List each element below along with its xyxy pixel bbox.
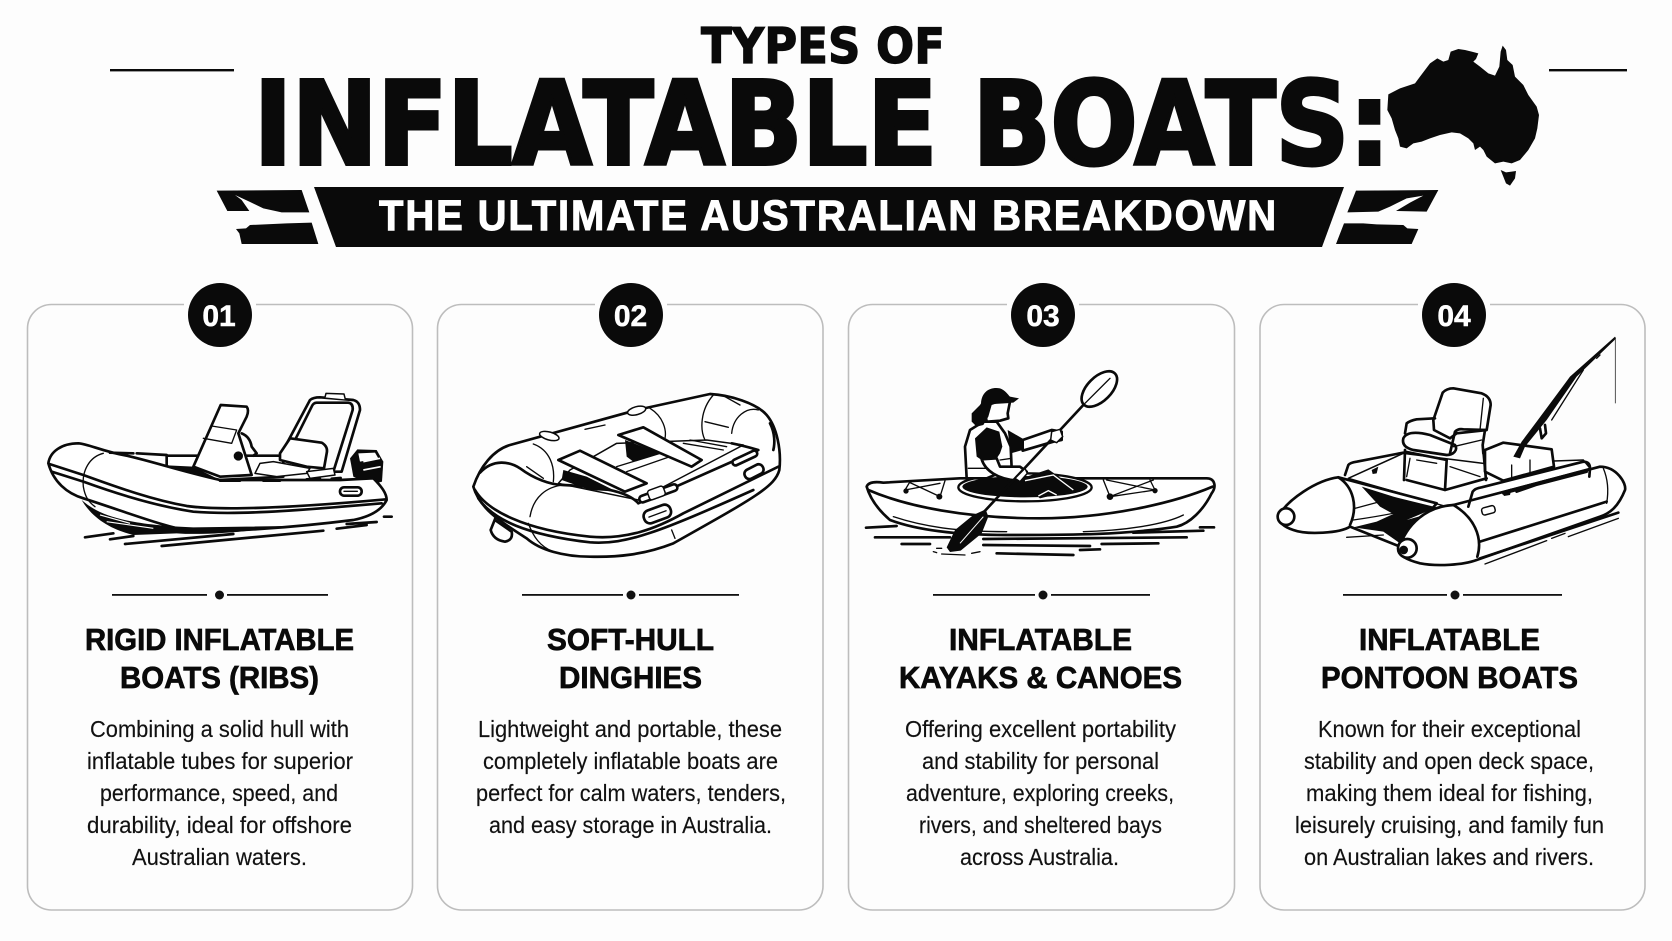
- icon: map of Australia: [1387, 46, 1539, 186]
- title side rule right: [1549, 69, 1627, 71]
- heading: [899, 622, 1182, 695]
- title side rule left: [110, 69, 234, 71]
- seat legs: [1404, 450, 1487, 490]
- description: [1295, 716, 1604, 870]
- illustration: rigid inflatable boat: [48, 393, 392, 546]
- description: completely inflatable boats are: [483, 748, 778, 774]
- rails far: [1345, 453, 1403, 475]
- under stripes: [1480, 513, 1618, 558]
- heading: KAYAKS & CANOES: [899, 660, 1182, 695]
- divider: [112, 590, 328, 600]
- ribbon tail right: [1336, 190, 1438, 244]
- engine: [350, 449, 383, 485]
- description: [905, 716, 1176, 870]
- description: leisurely cruising, and family fun: [1295, 812, 1604, 838]
- heading: DINGHIES: [559, 660, 702, 695]
- panel: card 2 soft-hull dinghies: [438, 283, 823, 910]
- illustration: kayak with paddler: [866, 365, 1214, 555]
- near rail: [1468, 462, 1590, 507]
- torso: [965, 422, 1012, 478]
- heading: SOFT-HULL: [547, 622, 714, 657]
- heading: RIGID INFLATABLE: [85, 622, 354, 657]
- title: types of: TYPES OF: [701, 18, 945, 75]
- head: [983, 402, 1010, 422]
- hull: [867, 478, 1214, 535]
- description: and easy storage in Australia.: [489, 812, 772, 838]
- divider: [933, 590, 1150, 600]
- heading: [85, 622, 354, 695]
- heading: INFLATABLE: [949, 622, 1132, 657]
- description: making them ideal for fishing,: [1306, 780, 1593, 806]
- number badge 02: 02: [614, 300, 647, 333]
- arms: [982, 458, 1027, 481]
- number badge 01: [184, 283, 256, 347]
- number badge 02: [595, 283, 667, 347]
- description: Lightweight and portable, these: [478, 716, 782, 742]
- description: Known for their exceptional: [1318, 716, 1581, 742]
- tube: [48, 443, 387, 532]
- number badge 01: 01: [202, 300, 236, 333]
- ribbon tail left: [217, 190, 318, 244]
- armrests: [1405, 418, 1435, 433]
- description: and stability for personal: [922, 748, 1159, 774]
- description: Australian waters.: [132, 844, 307, 870]
- title: inflatable boats: INFLATABLE BOATS:: [254, 58, 1390, 192]
- description: durability, ideal for offshore: [87, 812, 352, 838]
- heading: PONTOON BOATS: [1321, 660, 1578, 695]
- divider: [522, 590, 739, 600]
- cockpit: [958, 473, 1092, 501]
- rear frame: [283, 397, 360, 472]
- illustration: soft-hull dinghy: [473, 394, 780, 557]
- cooler: [1485, 443, 1554, 481]
- description: [476, 716, 786, 838]
- ribbon band: [314, 187, 1344, 247]
- near pontoon: [1398, 467, 1625, 565]
- subtitle: THE ULTIMATE AUSTRALIAN BREAKDOWN: [379, 192, 1278, 240]
- divider: [1343, 590, 1562, 600]
- panel: card 1 rigid inflatable boats: [28, 283, 412, 910]
- rod: [1513, 337, 1616, 458]
- description: rivers, and sheltered bays: [919, 812, 1162, 838]
- description: across Australia.: [960, 844, 1119, 870]
- description: stability and open deck space,: [1304, 748, 1594, 774]
- deck: [1348, 453, 1590, 507]
- seat: [280, 438, 327, 468]
- description: perfect for calm waters, tenders,: [476, 780, 786, 806]
- heading: INFLATABLE: [1359, 622, 1540, 657]
- description: adventure, exploring creeks,: [906, 780, 1174, 806]
- number badge 03: 03: [1026, 300, 1060, 333]
- description: Offering excellent portability: [905, 716, 1176, 742]
- heading: [1321, 622, 1578, 695]
- number badge 04: [1418, 283, 1490, 347]
- description: Combining a solid hull with: [90, 716, 349, 742]
- panel: card 3 inflatable kayaks and canoes: [848, 283, 1234, 910]
- panel: card 4 inflatable pontoon boats: [1260, 283, 1645, 910]
- number badge 03: [1007, 283, 1079, 347]
- number badge 04: 04: [1437, 300, 1471, 333]
- console: [193, 405, 252, 477]
- far pontoon: [1278, 477, 1437, 547]
- description: performance, speed, and: [100, 780, 338, 806]
- description: [87, 716, 353, 870]
- description: inflatable tubes for superior: [87, 748, 353, 774]
- bungee: [905, 480, 1155, 497]
- heading: [547, 622, 714, 695]
- paddle: [973, 405, 1083, 523]
- seat back: [1433, 388, 1491, 438]
- description: on Australian lakes and rivers.: [1304, 844, 1594, 870]
- banner ribbon: [217, 187, 1438, 247]
- heading: BOATS (RIBS): [120, 660, 319, 695]
- illustration: pontoon boat with seat and rod: [1278, 337, 1625, 565]
